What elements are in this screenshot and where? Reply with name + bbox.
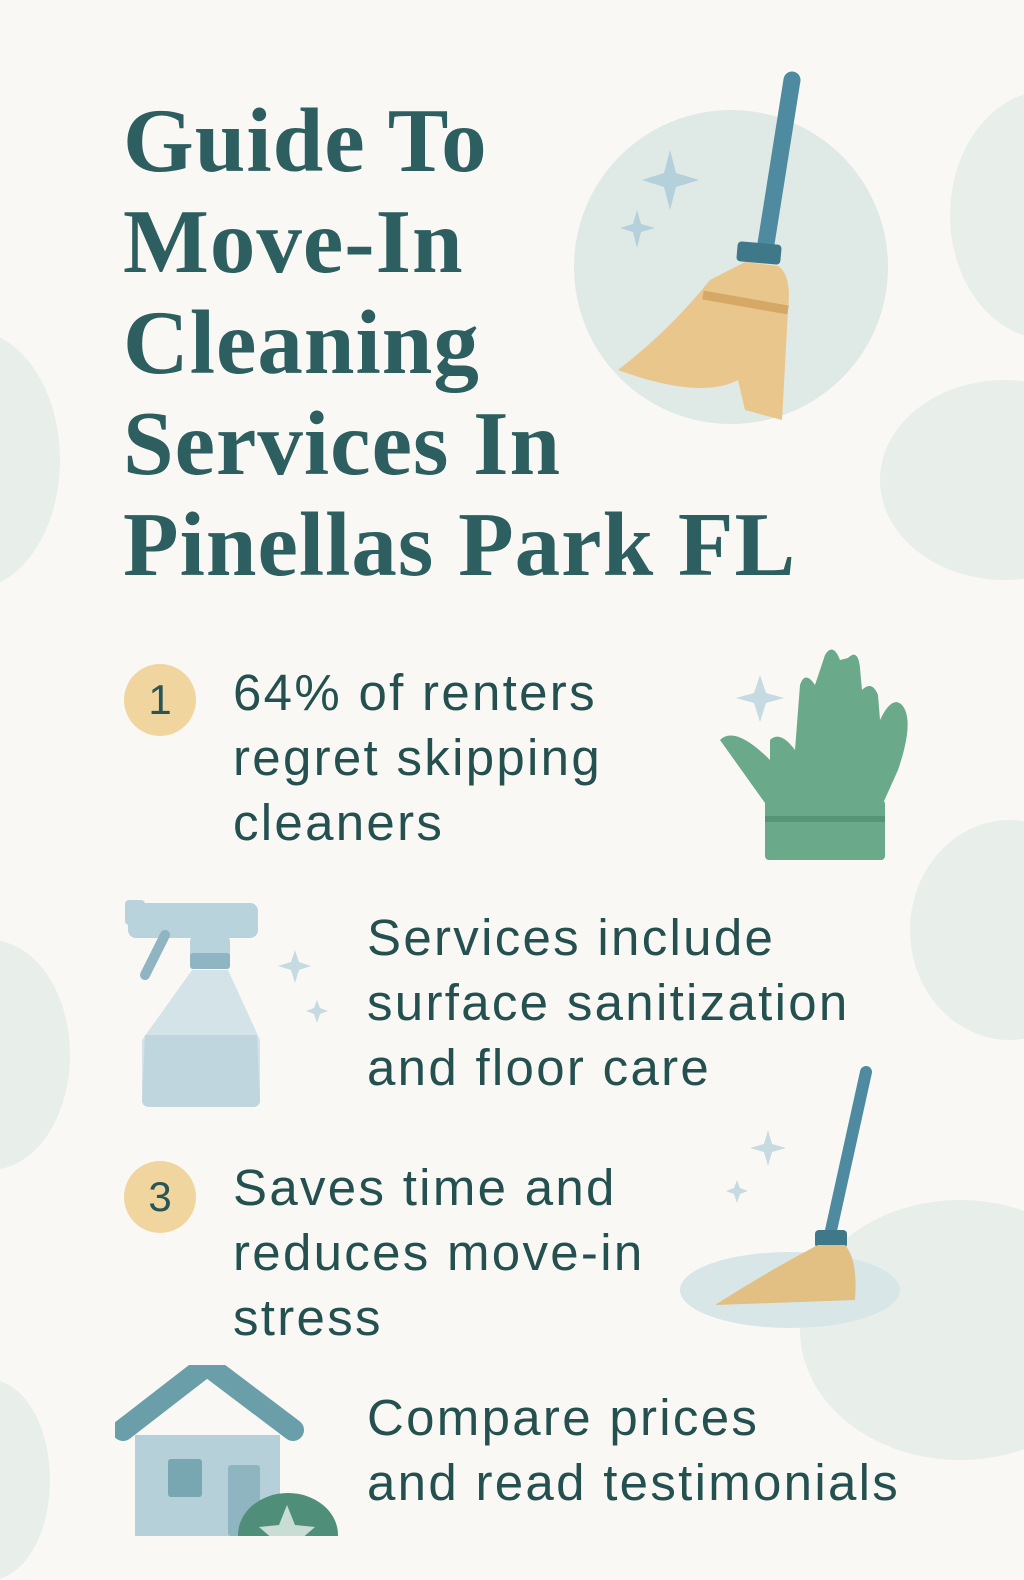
text 2 [367,909,850,1096]
icon: broom with circle [574,72,888,424]
title: Move-In [123,191,464,292]
text 1: cleaners [233,794,444,851]
title: Cleaning [123,292,480,393]
number badge 1: 1 [148,676,172,723]
text 1 [233,664,602,851]
text 2: Services include [367,909,775,966]
text 3: stress [233,1289,383,1346]
title: Guide To [123,90,488,191]
text 3: reduces move-in [233,1224,644,1281]
item 1 [124,664,602,851]
text 3: Saves time and [233,1159,617,1216]
number badge 3: 3 [148,1173,172,1220]
item 3 [124,1159,644,1346]
number badge 3 [124,1161,196,1233]
icon: mop [680,1066,900,1328]
title [123,90,796,595]
text 3 [233,1159,644,1346]
title: Services In [123,393,561,494]
text 4 [367,1389,900,1511]
icon: house with star badge [115,1365,338,1536]
text 1: regret skipping [233,729,602,786]
text 2: and floor care [367,1039,711,1096]
title: Pinellas Park FL [123,494,796,595]
number badge 1 [124,664,196,736]
icon: glove [720,650,908,860]
text 2: surface sanitization [367,974,850,1031]
text 1: 64% of renters [233,664,597,721]
text 4: and read testimonials [367,1454,900,1511]
icon: spray bottle [125,900,328,1107]
text 4: Compare prices [367,1389,759,1446]
